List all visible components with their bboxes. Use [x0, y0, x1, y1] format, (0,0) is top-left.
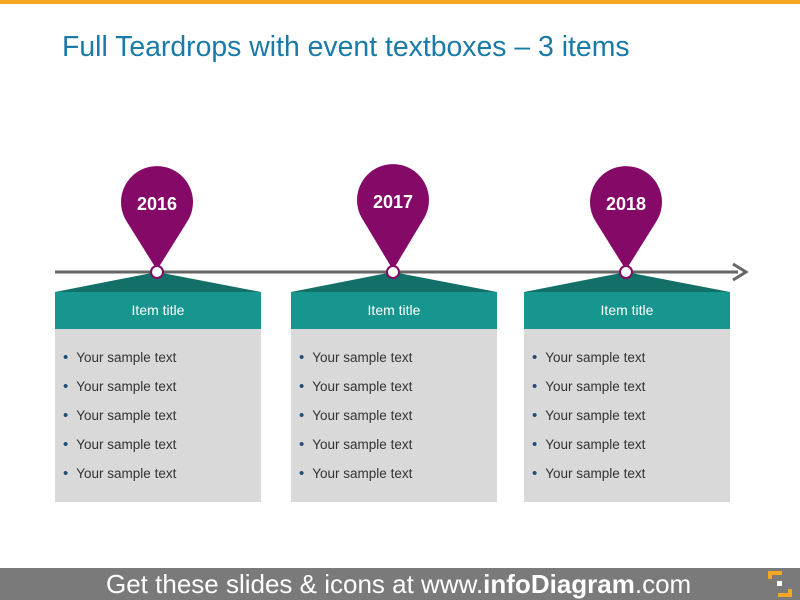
textbox 2: Your sample text — [312, 466, 412, 481]
textbox 1: Your sample text — [76, 379, 176, 394]
textbox 2: Your sample text — [312, 408, 412, 423]
textbox 3: Your sample text — [545, 408, 645, 423]
textbox 1 — [55, 329, 261, 502]
textbox 3 — [524, 329, 730, 502]
pin 2016: 2016 — [137, 194, 177, 214]
header 2 — [291, 292, 497, 329]
timeline arrow — [55, 264, 746, 280]
header 1: Item title — [132, 302, 184, 318]
header 3: Item title — [601, 302, 653, 318]
footer bar — [0, 568, 800, 600]
pin 2018 — [590, 166, 662, 278]
header 3 — [524, 292, 730, 329]
textbox 3: Your sample text — [545, 466, 645, 481]
header triangles — [55, 272, 730, 292]
textbox 3: Your sample text — [545, 379, 645, 394]
pin 2016 — [121, 166, 193, 278]
pin 2017: 2017 — [373, 192, 413, 212]
header 1 — [55, 292, 261, 329]
textbox 2 — [291, 329, 497, 502]
footer text: Get these slides & icons at www.infoDiagram.com — [106, 569, 691, 599]
textbox 1: Your sample text — [76, 350, 176, 365]
top accent bar — [0, 0, 800, 4]
textbox 2: Your sample text — [312, 379, 412, 394]
textbox 3: Your sample text — [545, 437, 645, 452]
header 2: Item title — [368, 302, 420, 318]
textbox 1: Your sample text — [76, 408, 176, 423]
pin 2018: 2018 — [606, 194, 646, 214]
textbox 1: Your sample text — [76, 437, 176, 452]
pin 2017 — [357, 164, 429, 278]
textbox 2: Your sample text — [312, 350, 412, 365]
icon: logo — [768, 571, 792, 597]
textbox 2: Your sample text — [312, 437, 412, 452]
title: Full Teardrops with event textboxes – 3 items — [62, 31, 630, 63]
textbox 3: Your sample text — [545, 350, 645, 365]
textbox 1: Your sample text — [76, 466, 176, 481]
